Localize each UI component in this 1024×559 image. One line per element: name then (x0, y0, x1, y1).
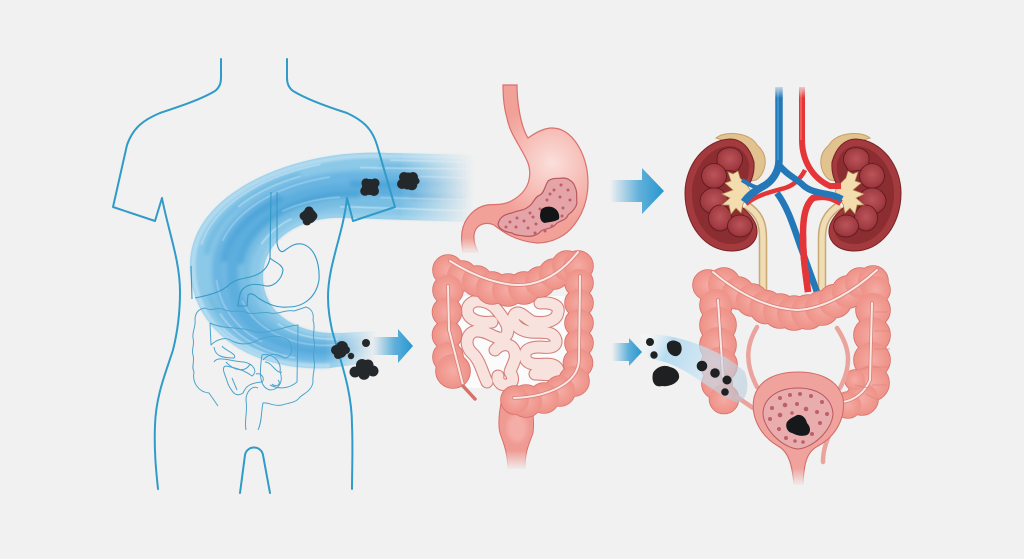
stomach (459, 85, 588, 254)
stomach tube fades (459, 238, 483, 254)
colon crease marks (855, 312, 890, 400)
stomach mucosa patch (498, 178, 577, 236)
right adrenal gland (821, 133, 870, 182)
right ureter (822, 205, 840, 292)
blue arrow to bladder (612, 338, 642, 366)
clots: lower group (331, 339, 378, 380)
rectum fade (503, 450, 531, 470)
left kidney (685, 139, 757, 251)
panel: colon and bladder (640, 266, 890, 486)
body outline (113, 59, 395, 493)
clots: upper three (300, 172, 420, 225)
bladder dots (768, 392, 829, 444)
rectum highlight (507, 414, 527, 442)
blue arrow to kidneys (610, 168, 664, 214)
bladder (753, 372, 844, 484)
panel: body with flow (113, 59, 474, 493)
bladder neck fade (788, 468, 810, 486)
stomach clot (540, 207, 559, 223)
stomach outline in body (191, 192, 319, 307)
large intestine (432, 251, 593, 470)
blue curved flow band (190, 153, 474, 368)
colon ribbons (448, 252, 580, 398)
right kidney (829, 139, 901, 251)
small intestine (459, 296, 569, 388)
bladder inner wall (763, 388, 833, 449)
mucosa dots (504, 184, 572, 234)
vessel highlights (778, 90, 801, 160)
blue stream (640, 333, 747, 403)
panel: kidneys and vessels (685, 84, 901, 292)
left adrenal gland (716, 133, 765, 182)
appendix (463, 386, 475, 399)
panel: stomach and intestines (432, 85, 593, 470)
red arteries (746, 87, 841, 292)
blue arrow to intestines (372, 329, 413, 363)
ureter tubes (737, 327, 848, 462)
red artery re-crossing (803, 235, 808, 292)
bladder clot (786, 415, 810, 436)
blue veins (742, 87, 842, 292)
infographic canvas (112, 58, 902, 494)
top fade for vessels (770, 84, 812, 98)
colon ribbons (713, 270, 877, 402)
stream clots (646, 338, 732, 396)
colon (693, 266, 890, 418)
intestines outline in body (192, 307, 315, 430)
rectum (499, 398, 534, 468)
left ureter (746, 205, 763, 292)
